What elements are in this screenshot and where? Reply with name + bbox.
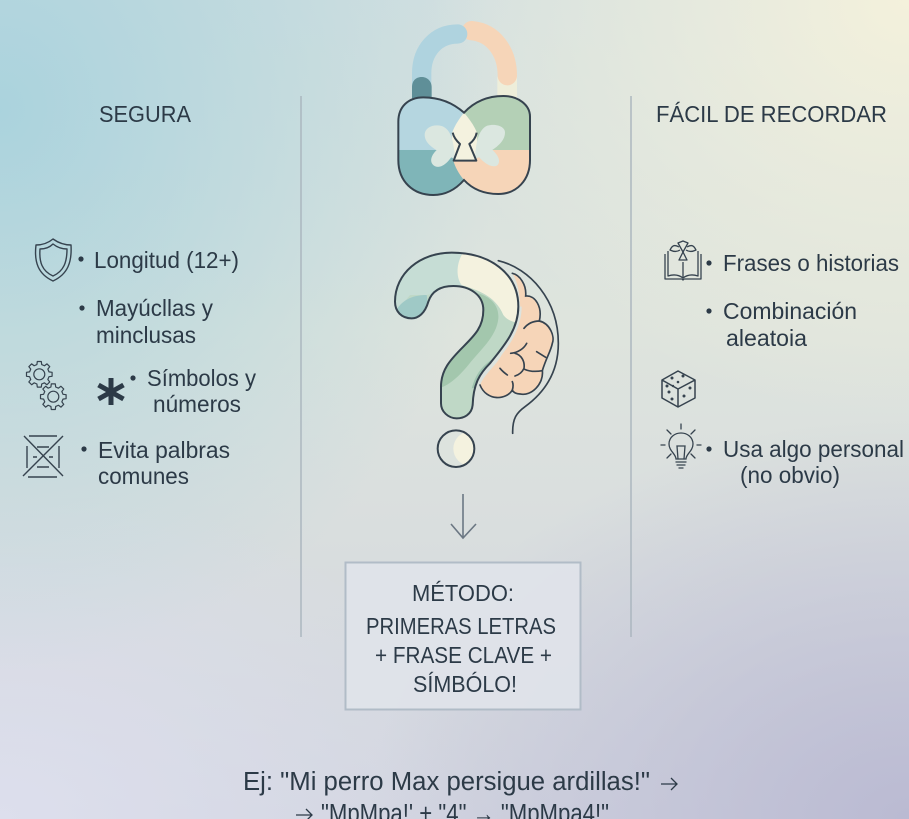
example text: Ej: "Mi perro Max persigue ardillas!" xyxy=(243,768,650,796)
method text: PRIMERAS LETRAS xyxy=(366,613,556,639)
bullet + usa algo personal: (no obvio) xyxy=(740,462,840,488)
icon: question mark with brain xyxy=(390,247,558,467)
bullet + mayúsculas: Mayúcllas y xyxy=(96,295,213,321)
question mark body xyxy=(473,307,518,390)
bullet + longitud: Longitud (12+) xyxy=(94,247,239,273)
bullet + mayúsculas xyxy=(79,295,213,348)
bullet + símbolos: Símbolos y xyxy=(147,365,256,391)
brain xyxy=(480,273,553,398)
icon: lightbulb xyxy=(661,424,701,468)
method text: SÍMBÓLO! xyxy=(413,671,517,697)
example text xyxy=(243,768,677,819)
method box xyxy=(346,562,580,710)
bullet + usa algo personal xyxy=(706,436,904,488)
method text xyxy=(366,580,556,697)
icon: open book with bow xyxy=(665,241,701,280)
heading: fácil de recordar: FÁCIL DE RECORDAR xyxy=(656,101,887,127)
bullet + mayúsculas: minclusas xyxy=(96,322,196,348)
icon: shield xyxy=(36,239,71,281)
divider left xyxy=(300,96,302,637)
right column: memorable list xyxy=(661,241,904,488)
head outline xyxy=(498,261,558,433)
bullet + evita: comunes xyxy=(98,463,189,489)
arrow: example line one xyxy=(661,778,677,790)
heading: segura: SEGURA xyxy=(99,101,191,127)
arrow: example line two xyxy=(296,809,312,819)
butterfly wings xyxy=(425,125,505,167)
method text: MÉTODO: xyxy=(412,580,514,606)
icon: gears xyxy=(26,362,66,410)
icon: asterisk xyxy=(98,378,124,405)
bullet + evita xyxy=(81,437,230,489)
icon: padlock with butterfly keyhole xyxy=(393,31,534,200)
bullet + combinación xyxy=(706,298,857,351)
bullet + usa algo personal: Usa algo personal xyxy=(723,436,904,462)
bullet + símbolos xyxy=(130,365,256,417)
arrow down xyxy=(451,494,476,538)
method text: + FRASE CLAVE + xyxy=(375,642,552,668)
bullet + combinación: Combinación xyxy=(723,298,857,324)
bullet + símbolos: números xyxy=(153,391,241,417)
icon: crossed-out box xyxy=(23,436,63,477)
divider right xyxy=(630,96,632,637)
bullet + combinación: aleatoia xyxy=(726,325,808,351)
icon: dice xyxy=(662,371,695,407)
bullet + evita: Evita palbras xyxy=(98,437,230,463)
bullet + frases: Frases o historias xyxy=(723,250,899,276)
question mark dot xyxy=(436,429,476,468)
left column: security list xyxy=(23,239,256,489)
